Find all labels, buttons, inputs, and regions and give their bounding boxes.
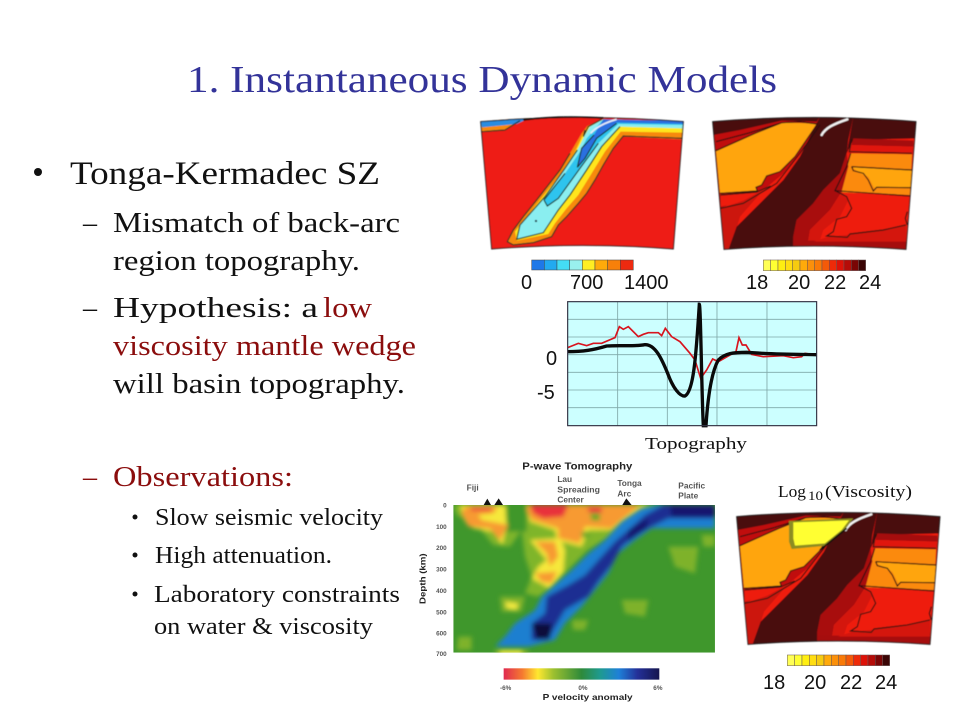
bullet list: Tonga-Kermadec SZ: Tonga-Kermadec SZ: [70, 156, 380, 192]
colorbar labels: temperature: [521, 272, 668, 294]
tomography labels: 500: [436, 610, 447, 617]
tomography colorbar labels: -6%: [500, 685, 512, 692]
bullet list: Tonga-Kermadec SZ: Hypothesis: a: [113, 293, 319, 324]
tomography labels: Plate: [678, 491, 699, 501]
bullet list: Tonga-Kermadec SZ: low: [323, 293, 373, 324]
bullet list: Tonga-Kermadec SZ: will basin topography.: [113, 369, 405, 400]
panel: temperature model: [481, 117, 683, 249]
tomography labels: Pacific: [678, 481, 706, 491]
viscosity panel title: Log: [778, 482, 807, 501]
bullet list: Tonga-Kermadec SZ: High attenuation.: [155, 543, 332, 569]
tomography labels: Fiji: [467, 483, 479, 493]
chart axis labels: [537, 348, 557, 404]
bullet list: Tonga-Kermadec SZ: Observations:: [113, 462, 293, 493]
tomography labels: [417, 461, 706, 658]
tomography labels: Depth (km): [417, 553, 427, 604]
colorbar labels: viscosity: 18: [746, 272, 768, 294]
tomography colorbar labels: 0%: [578, 685, 588, 692]
chart title: Topography: Topography: [645, 434, 748, 453]
colorbar labels: temperature: 700: [570, 272, 603, 294]
colorbar labels: viscosity: 20: [788, 272, 810, 294]
colorbar labels: viscosity 2: 24: [875, 672, 897, 694]
tomography labels: 600: [436, 631, 447, 638]
tomography colorbar labels: P velocity anomaly: [543, 692, 633, 702]
tomography labels: Arc: [617, 488, 632, 498]
colorbar labels: viscosity: 22: [824, 272, 846, 294]
bullet list: Tonga-Kermadec SZ: on water & viscosity: [154, 614, 373, 640]
colorbar labels: temperature: 1400: [624, 272, 668, 294]
tomography labels: Center: [557, 495, 584, 505]
colorbar labels: viscosity 2: [763, 672, 897, 694]
volcano markers: [484, 498, 632, 505]
colorbar labels: temperature: 0: [521, 272, 532, 294]
panel: viscosity model: [710, 117, 917, 271]
colorbar labels: viscosity 2: 18: [763, 672, 785, 694]
panel: viscosity model with low-viscosity wedge: [734, 512, 941, 666]
red observed line: [568, 327, 817, 378]
tomography labels: 0: [443, 503, 447, 510]
low viscosity wedge patch: [789, 518, 853, 549]
chart: topography: [568, 302, 817, 426]
viscosity panel title: 10: [808, 488, 823, 503]
tomography labels: Spreading: [557, 484, 600, 494]
panel: P-wave tomography: [417, 461, 715, 702]
tomography labels: 200: [436, 545, 447, 552]
colorbar labels: viscosity: 24: [859, 272, 881, 294]
bullet list: Tonga-Kermadec SZ: –: [82, 462, 98, 493]
viscosity panel title: (Viscosity): [825, 482, 912, 501]
black model line: [568, 304, 817, 426]
chart axis labels: 0: [546, 348, 557, 370]
tomography colorbar labels: [500, 685, 663, 702]
bullet list: Tonga-Kermadec SZ: region topography.: [113, 246, 360, 277]
tomography labels: 100: [436, 524, 447, 531]
tomography colorbar labels: 6%: [653, 685, 663, 692]
bullet list: Tonga-Kermadec SZ: –: [82, 293, 98, 324]
chart axis labels: -5: [537, 382, 555, 404]
colorbar labels: viscosity 2: 22: [840, 672, 862, 694]
title: 1. Instantaneous Dynamic Models: [187, 59, 777, 101]
bullet list: Tonga-Kermadec SZ: –: [82, 208, 98, 239]
tomography labels: Lau: [557, 474, 572, 484]
colorbar labels: viscosity: [746, 272, 881, 294]
tomography colorbar: [504, 668, 659, 680]
bullet list: Tonga-Kermadec SZ: Laboratory constraints: [154, 582, 400, 608]
bullet list: Tonga-Kermadec SZ: Mismatch of back-arc: [113, 208, 400, 239]
tomography labels: Tonga: [617, 478, 642, 488]
bullet list: Tonga-Kermadec SZ: [34, 156, 416, 640]
colorbar labels: viscosity 2: 20: [804, 672, 826, 694]
bullet list: Tonga-Kermadec SZ: viscosity mantle wedge: [113, 331, 416, 362]
tomography labels: 700: [436, 651, 447, 658]
bullet list: Tonga-Kermadec SZ: Slow seismic velocity: [155, 505, 383, 531]
tomography labels: 300: [436, 567, 447, 574]
viscosity panel title: [778, 482, 912, 503]
tomography labels: 400: [436, 588, 447, 595]
colorbar: temperature: [532, 260, 633, 270]
tomography labels: P-wave Tomography: [522, 461, 633, 472]
